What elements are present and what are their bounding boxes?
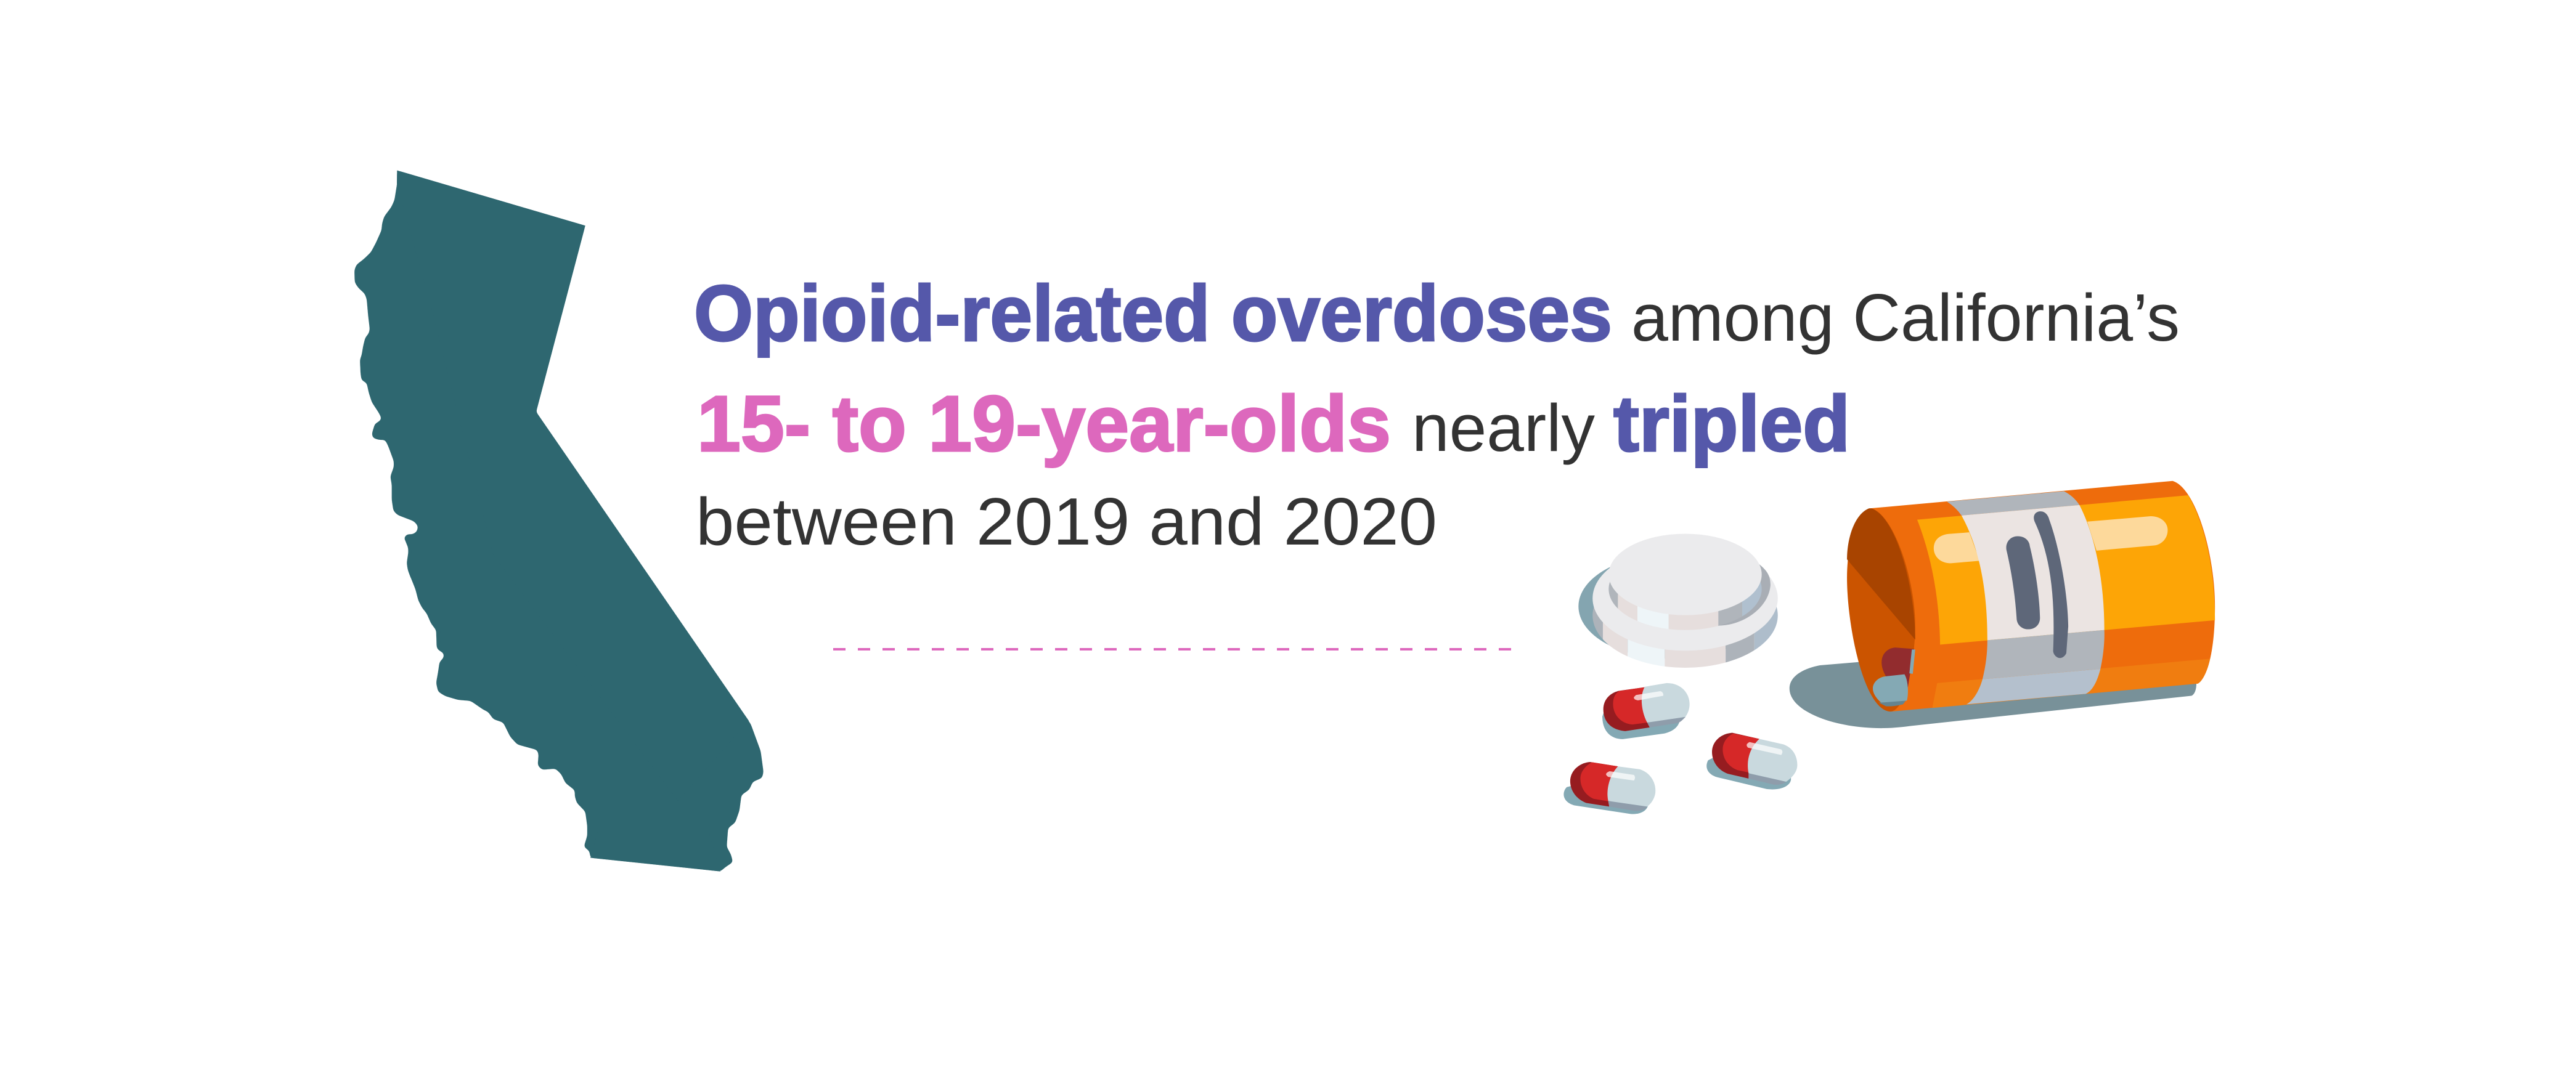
bottle cap	[1578, 534, 1781, 675]
headline text	[694, 270, 2180, 559]
capsule: right	[1706, 733, 1797, 789]
dashed divider	[833, 648, 1514, 650]
pill bottle	[1790, 481, 2215, 728]
map: California silhouette	[354, 171, 764, 872]
illustration: spilled pill bottle	[1563, 481, 2215, 814]
headline line 1	[694, 270, 2180, 358]
headline line 2: tripled	[1613, 380, 1850, 468]
headline line 2: nearly	[1412, 391, 1595, 466]
headline line 2	[697, 380, 1850, 468]
headline line 1: Opioid-related overdoses	[694, 270, 1612, 358]
headline line 3: between 2019 and 2020	[696, 484, 1437, 559]
capsule: lower left	[1563, 762, 1655, 814]
infographic canvas	[354, 170, 2215, 872]
headline line 2: 15- to 19-year-olds	[697, 380, 1391, 468]
headline line 1: among California’s	[1631, 280, 2180, 355]
capsule: upper left	[1602, 683, 1690, 739]
